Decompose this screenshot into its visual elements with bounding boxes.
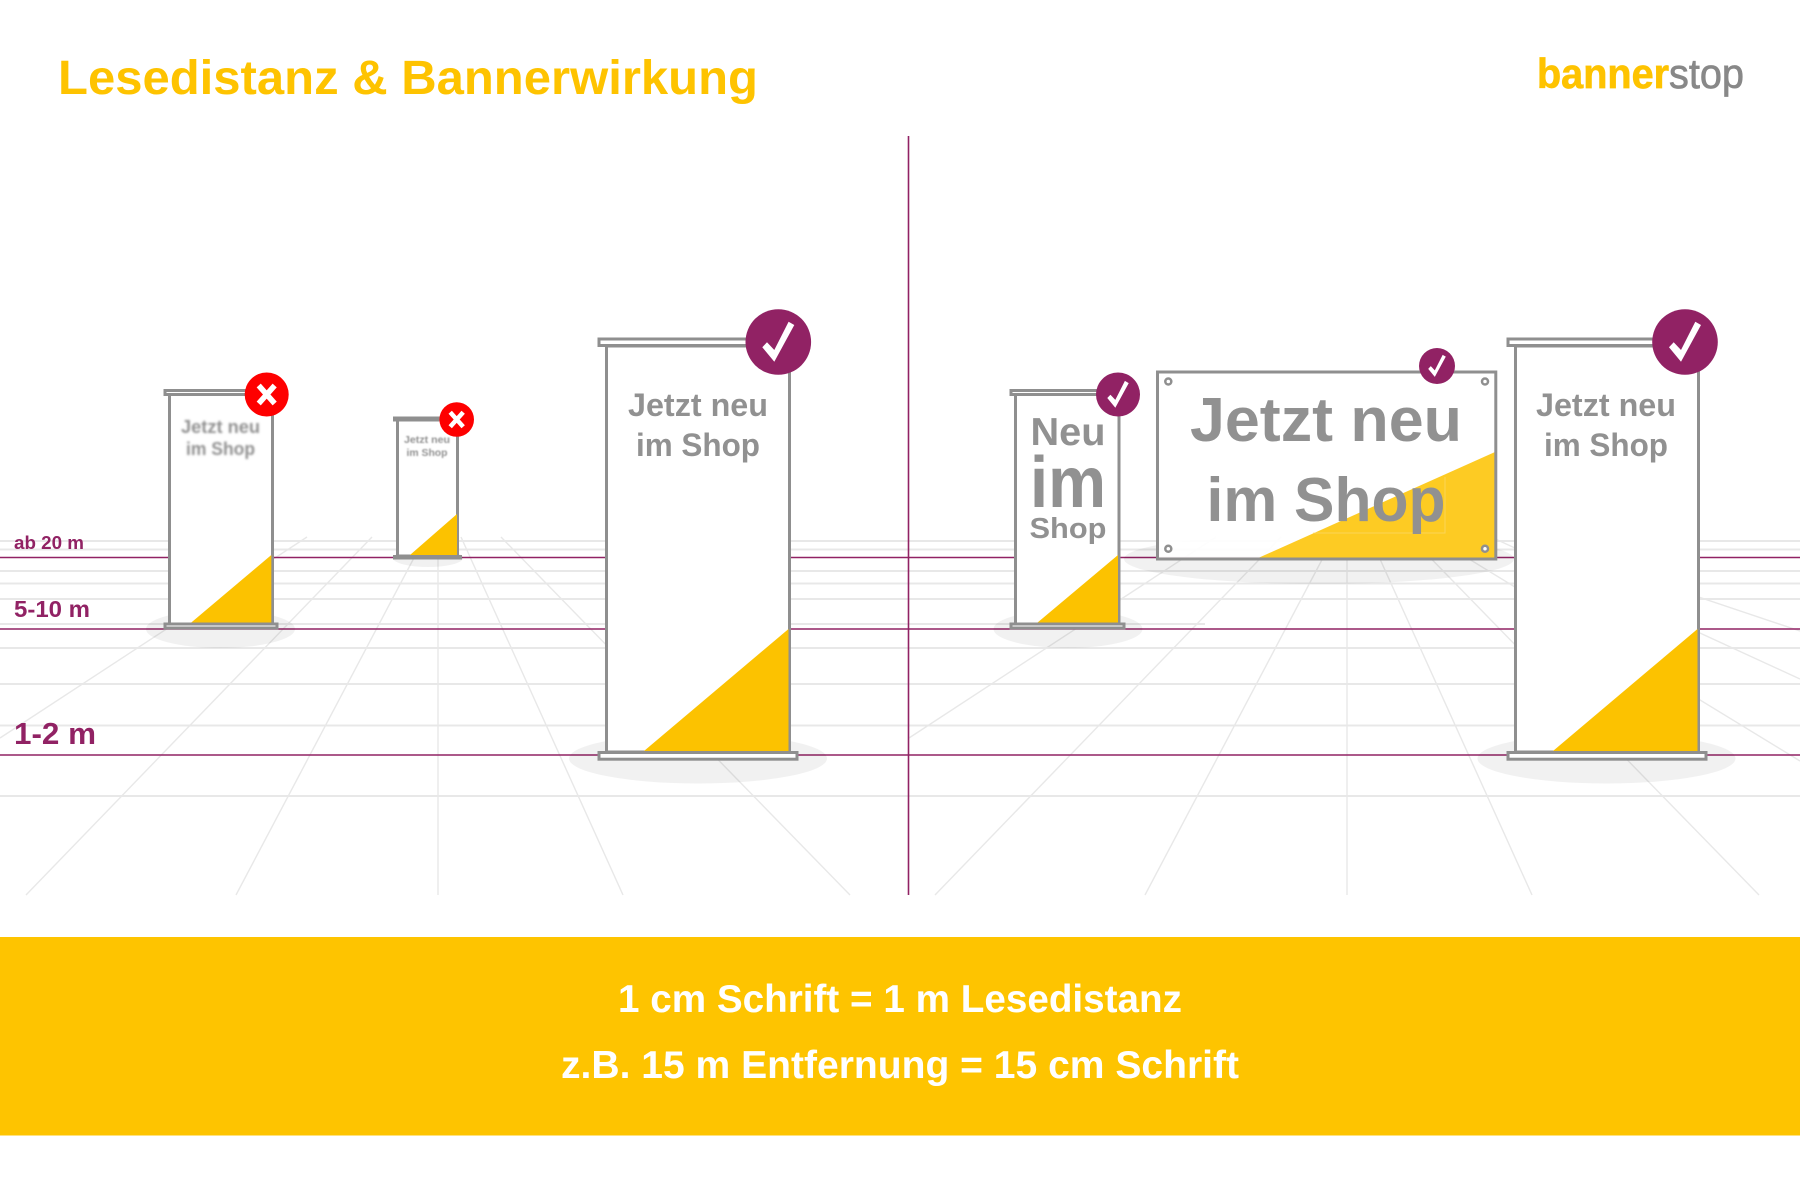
perspective floor grid [0,537,1800,895]
logo: bannerstop: banner [1537,50,1669,97]
panel: too small text roll-up 5-10 m: im Shop [186,439,255,459]
logo: bannerstop: stop [1669,50,1744,97]
distance label: 1-2 m: 1-2 m [14,716,96,751]
icon: check [1096,372,1140,416]
distance label: 5-10 m: 5-10 m [14,596,90,622]
panel: too small text roll-up ab 20 m [393,402,474,567]
panel: too small text roll-up 5-10 m [146,372,295,648]
logo: bannerstop [1537,50,1744,97]
icon: large check right [1652,309,1718,375]
panel: readable roll-up with large text 5-10 m: Neu [1030,411,1106,454]
panel: landscape banner [1124,348,1514,584]
panel: readable roll-up with large text 5-10 m: Shop [1030,513,1106,545]
yellow formula band: 1 cm Schrift = 1 m Lesedistanz [618,978,1182,1021]
panel: readable roll-up 1-2 m right: im Shop [1544,427,1668,463]
panel: readable roll-up 1-2 m right [1478,309,1736,784]
distance lines [0,136,1800,895]
icon: small check [1419,348,1455,384]
icon: small red cross [439,402,474,437]
panel: readable roll-up 1-2 m left: Jetzt neu [628,387,768,423]
panel: landscape banner: im Shop [1206,466,1446,535]
panel: readable roll-up with large text 5-10 m: im [1030,443,1106,523]
panel: readable roll-up 1-2 m left: im Shop [636,427,760,463]
panel: too small text roll-up ab 20 m: im Shop [406,448,448,459]
panel: landscape banner: Jetzt neu [1190,386,1462,455]
panel: readable roll-up 1-2 m right: Jetzt neu [1536,387,1676,423]
panel: too small text roll-up 5-10 m: Jetzt neu [181,417,260,437]
icon: red cross [245,372,289,416]
panel: too small text roll-up ab 20 m: Jetzt neu [404,435,450,446]
yellow formula band [0,937,1800,1136]
panel: readable roll-up with large text 5-10 m [994,372,1142,648]
panel: readable roll-up 1-2 m left [569,309,827,784]
yellow formula band: z.B. 15 m Entfernung = 15 cm Schrift [561,1044,1239,1087]
distance label: ab 20 m: ab 20 m [14,533,84,553]
title: Lesedistanz & Bannerwirkung [58,52,758,105]
icon: large check [746,309,811,375]
